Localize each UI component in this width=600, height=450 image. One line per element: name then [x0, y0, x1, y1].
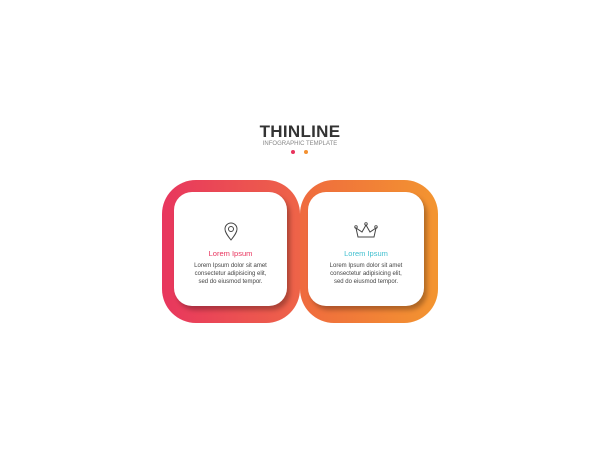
- panel: left ring: [162, 180, 300, 323]
- text block: consectetur adipisicing elit,: [330, 271, 402, 277]
- text block: sed do eiusmod tempor.: [334, 279, 398, 285]
- text block: [330, 262, 402, 285]
- dots: [291, 150, 308, 154]
- text block: Lorem Ipsum dolor sit amet: [330, 263, 402, 269]
- icon: location pin: [224, 222, 238, 241]
- title: THINLINE: [260, 122, 340, 141]
- text block: sed do eiusmod tempor.: [198, 279, 263, 285]
- heading: Lorem Ipsum: [344, 249, 388, 258]
- heading: Lorem Ipsum: [209, 249, 252, 258]
- subtitle: INFOGRAPHIC TEMPLATE: [263, 141, 337, 147]
- panel: left card: [174, 192, 287, 306]
- text block: [194, 262, 267, 285]
- panel: right card: [308, 192, 424, 306]
- panel: right ring: [300, 180, 438, 323]
- text block: Lorem Ipsum dolor sit amet: [194, 263, 267, 269]
- icon: crown: [354, 222, 378, 238]
- text block: consectetur adipisicing elit,: [195, 271, 266, 277]
